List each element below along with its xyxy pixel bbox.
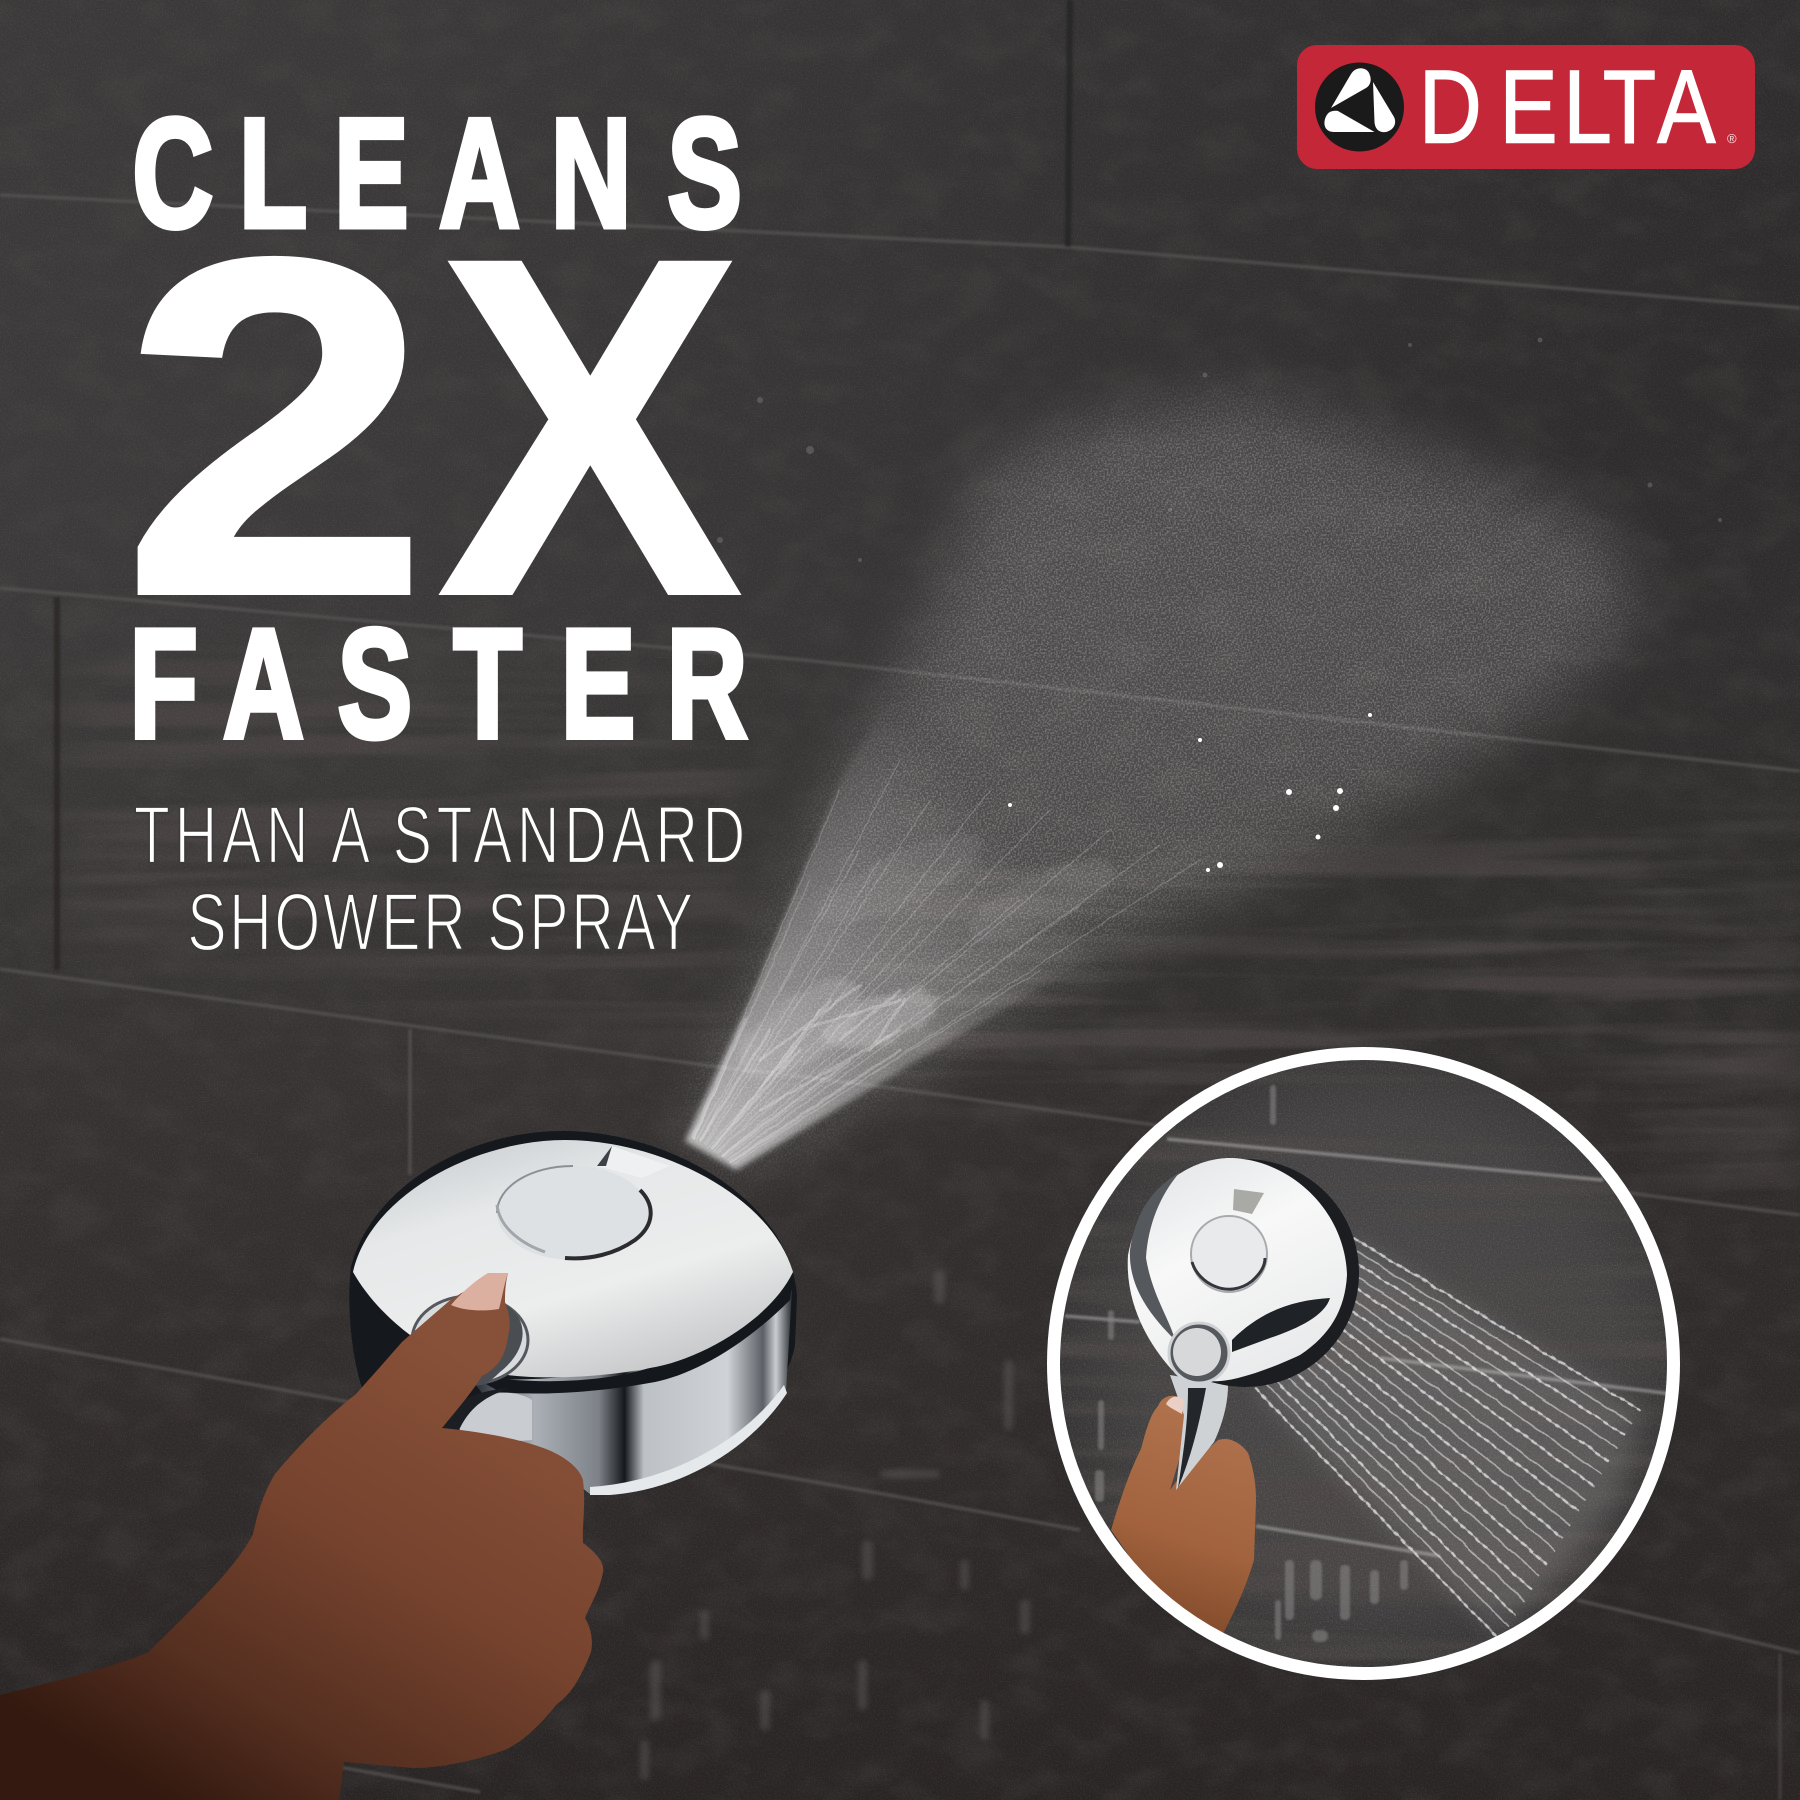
inset thumbnail <box>1166 1397 1184 1414</box>
inset circle: standard spray comparison <box>1050 1050 1680 1680</box>
large round button <box>497 1166 651 1260</box>
headline text <box>121 86 747 968</box>
emblem top petal <box>1331 68 1371 108</box>
big 2X: 2 <box>121 159 430 695</box>
spray selector tag <box>597 1146 670 1178</box>
head chrome dome <box>353 1140 793 1377</box>
word: faster: FASTER <box>130 597 747 770</box>
inset water jets <box>1256 1239 1640 1640</box>
word: cleans: CLEANS <box>132 86 742 260</box>
inset wall and water detail <box>1050 1050 1680 1680</box>
thumbnail <box>451 1273 508 1310</box>
inset toggle button <box>1169 1323 1229 1383</box>
registered mark: ® <box>1727 131 1737 146</box>
inset selector tag <box>1233 1189 1264 1214</box>
head dark back shell <box>349 1131 797 1494</box>
water spray fan <box>685 395 1640 1170</box>
spray grain <box>685 395 1640 1170</box>
emblem right petal <box>1373 82 1395 132</box>
big 2X: X <box>438 159 744 696</box>
bottom lip <box>590 1385 787 1495</box>
spray mist cloud <box>685 395 1640 1170</box>
inset white ring <box>1054 1054 1674 1674</box>
subtitle line two: SHOWER SPRAY <box>187 877 693 968</box>
bright droplets <box>1008 713 1372 872</box>
big 2X <box>121 159 744 696</box>
inset head rim <box>1131 1159 1359 1387</box>
inset head face <box>1128 1158 1347 1381</box>
wet splash marks lower wall <box>640 1270 1030 1780</box>
brand name: DELTA <box>1419 49 1716 165</box>
inset hand <box>1111 1396 1256 1636</box>
spray bright core <box>723 818 1123 1098</box>
emblem bottom petal <box>1324 111 1374 132</box>
subtitle line one: THAN A STANDARD <box>134 790 745 881</box>
head chrome side band <box>470 1290 792 1494</box>
toggle button ring <box>412 1296 532 1445</box>
inset spray haze <box>1256 1240 1640 1640</box>
red badge <box>1297 45 1755 169</box>
inset background <box>1060 1060 1668 1668</box>
band dark reflection <box>470 1285 792 1394</box>
hand and thumb <box>0 1273 603 1800</box>
inset shower head <box>1128 1158 1359 1490</box>
inset big button <box>1191 1216 1267 1292</box>
spray streaks <box>692 760 1200 1165</box>
emblem circle <box>1315 62 1404 152</box>
inset handle <box>1170 1375 1228 1490</box>
Delta logo badge <box>1297 45 1755 169</box>
stray droplets on wall <box>717 338 1722 562</box>
shower head, large view <box>0 1131 797 1800</box>
inset chrome reflections <box>1130 1172 1180 1340</box>
spray wedge near nozzle <box>685 679 1180 1170</box>
